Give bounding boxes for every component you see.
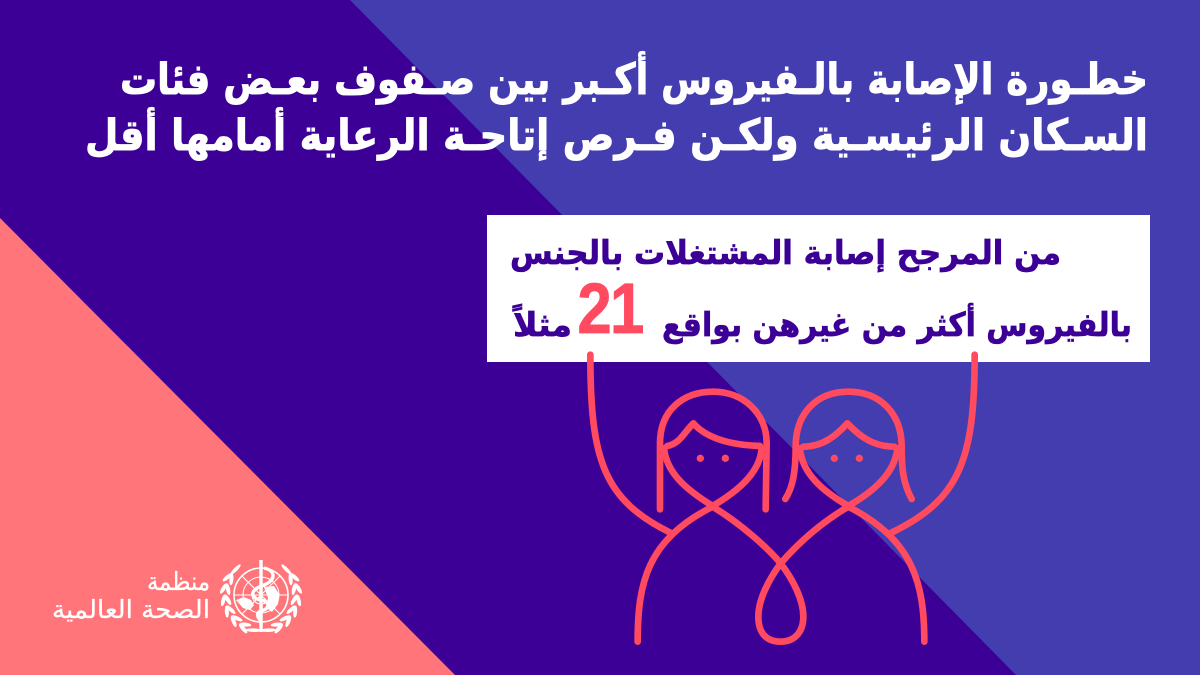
callout number 21: 21 [577,270,643,349]
background: blue diagonal panel [350,0,1200,675]
left woman face [664,448,762,506]
eyes [697,455,863,462]
right woman face [800,448,897,506]
panel: white callout [487,215,1150,362]
continents [236,586,279,612]
left woman hair [660,392,767,509]
bodies with ribbon loop [638,507,924,642]
callout word: مثلاً [512,303,572,344]
callout line 2: بالفيروس أكثر من غيرهن بواقع [662,303,1132,345]
staff and serpent [259,560,263,632]
globe [234,568,288,622]
left branch [219,563,262,634]
logo text: WHO name: الصحة العالمية [52,595,210,624]
callout line 1: من المرجح إصابة المشتغلات بالجنس [510,233,1061,273]
right woman fringe [803,423,894,447]
right arm [890,355,975,533]
illustration: two women [590,355,975,642]
left arm [590,355,672,533]
right branch [260,563,303,634]
laurel wreath [219,563,303,634]
title [85,51,1148,161]
background: coral diagonal panel [0,218,455,675]
logo text: WHO name: منظمة [147,567,210,596]
logo text: WHO name [52,567,210,624]
icon: WHO emblem [219,560,303,634]
right woman hair [785,392,912,499]
left woman fringe [667,423,760,446]
